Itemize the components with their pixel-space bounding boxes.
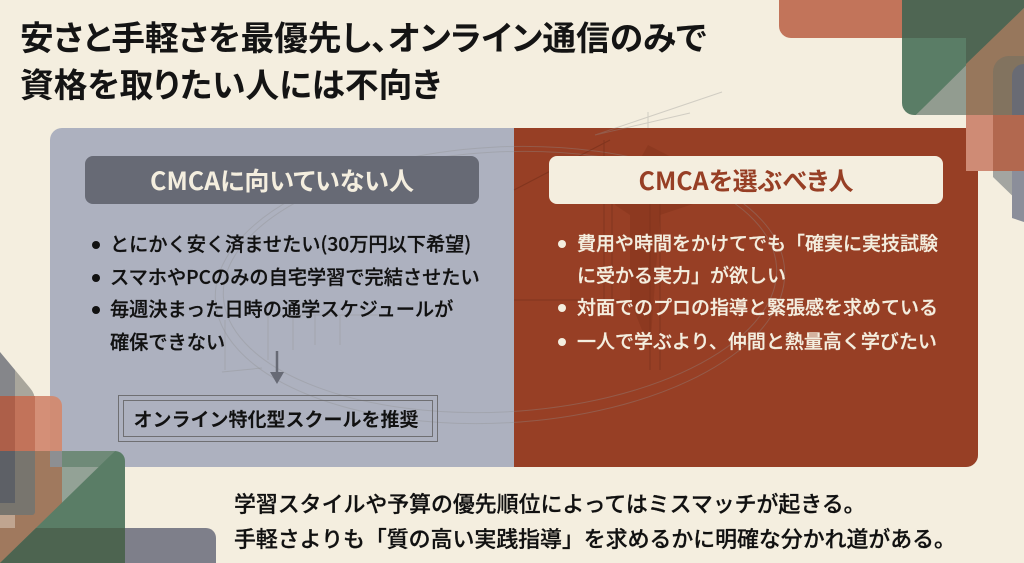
- heading: 資格を取りたい人には不向き: [20, 58, 441, 107]
- heading: [20, 11, 707, 107]
- text: conclusion: [234, 488, 956, 554]
- arrow: [270, 351, 284, 384]
- list: not suited items: [92, 229, 480, 354]
- item 3: [92, 294, 453, 354]
- text: conclusion: 手軽さよりも「質の高い実践指導」を求めるかに明確な分かれ道がある。: [234, 523, 956, 554]
- heading: 安さと手軽さを最優先し、オンライン通信のみで: [20, 11, 707, 60]
- item 3: 毎週決まった日時の通学スケジュールが: [110, 294, 453, 322]
- item 2: 対面でのプロの指導と緊張感を求めている: [577, 293, 938, 320]
- panel: comparison background: [50, 128, 978, 467]
- label: recommended heading: CMCAを選ぶべき人: [639, 162, 853, 198]
- item 1: [558, 229, 938, 288]
- list: recommended items: [558, 229, 938, 354]
- callout: online school: オンライン特化型スクールを推奨: [133, 405, 418, 432]
- panel: right half: [514, 128, 978, 467]
- callout: online school: [118, 395, 438, 442]
- item 1: に受かる実力」が欲しい: [577, 260, 786, 288]
- label: recommended heading: [549, 156, 943, 204]
- panel: not suited: [85, 156, 480, 442]
- label: not suited heading: CMCAに向いていない人: [150, 162, 414, 198]
- label: not suited heading: [85, 156, 479, 204]
- text: conclusion: 学習スタイルや予算の優先順位によってはミスマッチが起きる。: [234, 488, 866, 519]
- item 2: スマホやPCのみの自宅学習で完結させたい: [110, 262, 480, 290]
- item 3: 一人で学ぶより、仲間と熱量高く学びたい: [577, 327, 937, 354]
- item 1: とにかく安く済ませたい(30万円以下希望): [110, 229, 471, 257]
- panel: recommended: [549, 156, 943, 354]
- item 1: 費用や時間をかけてでも「確実に実技試験: [577, 229, 938, 256]
- item 3: 確保できない: [110, 326, 225, 354]
